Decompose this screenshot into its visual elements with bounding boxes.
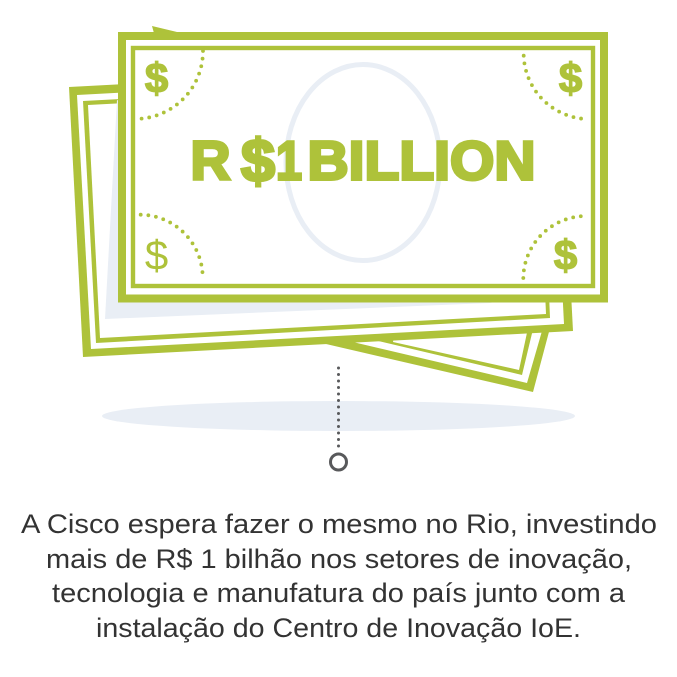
icon: dollar bottom right: $	[554, 232, 577, 278]
amount heading: BILLION	[308, 130, 536, 192]
front bill	[122, 36, 604, 298]
corner arc bottom right	[523, 216, 587, 278]
body text: tecnologia e manufatura do país junto com a	[52, 578, 626, 608]
amount heading: $	[241, 128, 275, 194]
shadow ellipse	[102, 401, 575, 431]
body text: mais de R$ 1 bilhão nos setores de inovação,	[46, 544, 632, 574]
icon: dollar bottom left: $	[145, 232, 168, 278]
center oval	[286, 64, 440, 260]
amount heading: 1	[276, 130, 302, 192]
back bill tilted left	[69, 61, 573, 357]
body text	[21, 509, 657, 643]
icon: dollar top right: $	[559, 54, 582, 102]
icon: dollar top left: $	[145, 54, 168, 102]
inner frame	[133, 48, 593, 286]
amount heading: R	[190, 130, 230, 192]
amount heading	[190, 128, 536, 194]
connector circle	[330, 454, 346, 470]
back bill tilted right	[152, 26, 600, 392]
corner arc bottom left	[141, 215, 203, 278]
corner arc top left	[140, 51, 203, 119]
corner arc top right	[524, 56, 586, 119]
bill shadow	[105, 100, 600, 319]
bill frame	[122, 36, 604, 298]
body text: A Cisco espera fazer o mesmo no Rio, investindo	[21, 509, 657, 539]
body text: instalação do Centro de Inovação IoE.	[96, 613, 581, 643]
dotted connector	[337, 368, 340, 450]
